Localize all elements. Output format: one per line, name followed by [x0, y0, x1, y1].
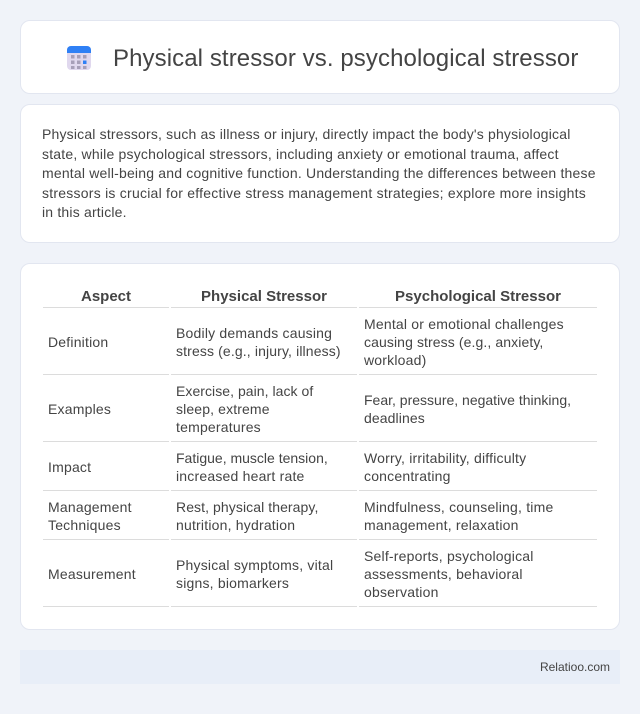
- row: management techniques: Management: [48, 499, 132, 515]
- intro text: state, while psychological stressors, including anxiety or emotional trauma, affect: [42, 146, 559, 162]
- intro text: [42, 126, 596, 220]
- row: management techniques: [48, 499, 132, 533]
- definition psychological: workload): [364, 352, 426, 368]
- header: aspect: Aspect: [81, 288, 131, 305]
- examples physical: Exercise, pain, lack of: [176, 383, 313, 399]
- measurement psychological: [364, 548, 534, 600]
- measurement psychological: assessments, behavioral: [364, 566, 523, 582]
- impact psychological: Worry, irritability, difficulty: [364, 450, 526, 466]
- intro text: mental well-being and cognitive function. Understanding the differences between these: [42, 165, 596, 181]
- management psychological: Mindfulness, counseling, time: [364, 499, 553, 515]
- definition psychological: causing stress (e.g., anxiety,: [364, 334, 543, 350]
- footer text: Relatioo.com: [540, 660, 610, 674]
- impact physical: [176, 450, 328, 484]
- definition physical: [176, 325, 341, 359]
- measurement physical: [176, 557, 333, 591]
- footer: [20, 650, 620, 684]
- impact psychological: concentrating: [364, 468, 451, 484]
- impact physical: Fatigue, muscle tension,: [176, 450, 328, 466]
- examples psychological: Fear, pressure, negative thinking,: [364, 392, 571, 408]
- examples physical: [176, 383, 314, 435]
- intro text: stressors is crucial for effective stress management strategies; explore more insights: [42, 184, 586, 200]
- examples physical: temperatures: [176, 419, 261, 435]
- management physical: [176, 499, 318, 533]
- header card: [20, 20, 620, 94]
- definition psychological: Mental or emotional challenges: [364, 316, 564, 332]
- management physical: Rest, physical therapy,: [176, 499, 318, 515]
- measurement physical: Physical symptoms, vital: [176, 557, 333, 573]
- row: management techniques: Techniques: [48, 517, 121, 533]
- definition psychological: [364, 316, 564, 368]
- row: impact: Impact: [48, 459, 91, 475]
- management physical: nutrition, hydration: [176, 517, 295, 533]
- examples psychological: [364, 392, 571, 426]
- row: examples: Examples: [48, 401, 111, 417]
- header: psychological stressor: Psychological Stressor: [395, 288, 561, 305]
- row: measurement: Measurement: [48, 566, 136, 582]
- icon: calendar: [67, 46, 91, 70]
- header: physical stressor: Physical Stressor: [201, 288, 327, 305]
- intro text: in this article.: [42, 204, 127, 220]
- management psychological: management, relaxation: [364, 517, 519, 533]
- table card: [20, 263, 620, 630]
- measurement psychological: observation: [364, 584, 439, 600]
- title: Physical stressor vs. psychological stressor: [113, 45, 578, 72]
- impact physical: increased heart rate: [176, 468, 305, 484]
- row: definition: Definition: [48, 334, 108, 350]
- management psychological: [364, 499, 553, 533]
- intro card: [20, 104, 620, 243]
- examples physical: sleep, extreme: [176, 401, 270, 417]
- impact psychological: [364, 450, 526, 484]
- measurement psychological: Self-reports, psychological: [364, 548, 534, 564]
- examples psychological: deadlines: [364, 410, 425, 426]
- definition physical: stress (e.g., injury, illness): [176, 343, 341, 359]
- intro text: Physical stressors, such as illness or injury, directly impact the body's physiological: [42, 126, 570, 142]
- definition physical: Bodily demands causing: [176, 325, 332, 341]
- measurement physical: signs, biomarkers: [176, 575, 289, 591]
